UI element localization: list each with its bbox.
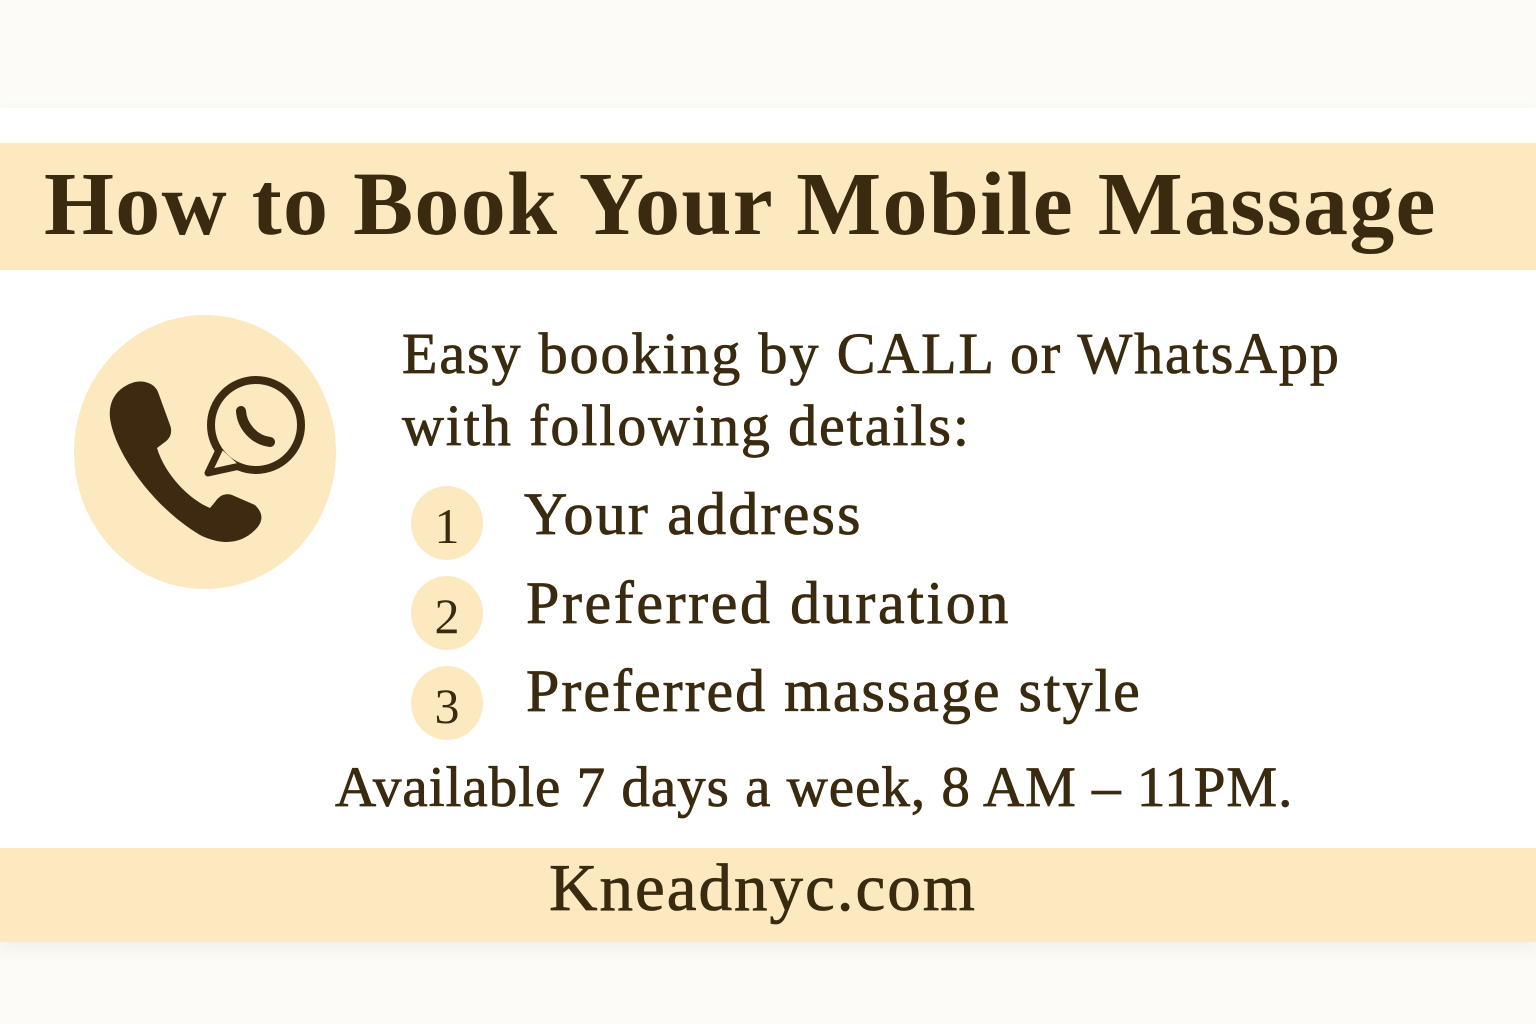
text: Preferred massage style xyxy=(526,658,1142,724)
footer band xyxy=(0,848,1536,942)
text: 1 xyxy=(434,498,460,554)
intro text: with following details: xyxy=(402,393,971,458)
intro text xyxy=(402,321,1341,458)
title band xyxy=(0,143,1536,270)
availability text: Available 7 days a week, 8 AM – 11PM. xyxy=(335,756,1293,819)
list item 3 xyxy=(411,658,1142,740)
list item 1 xyxy=(411,481,863,560)
text: 2 xyxy=(434,588,460,644)
intro text: Easy booking by CALL or WhatsApp xyxy=(402,321,1341,386)
list item 2 xyxy=(411,570,1011,650)
text: Preferred duration xyxy=(526,570,1011,636)
text: Your address xyxy=(524,481,863,547)
text: 3 xyxy=(434,678,460,734)
icon: phone and whatsapp xyxy=(74,315,336,589)
title: How to Book Your Mobile Massage xyxy=(44,155,1437,254)
website: Kneadnyc.com xyxy=(549,851,977,925)
